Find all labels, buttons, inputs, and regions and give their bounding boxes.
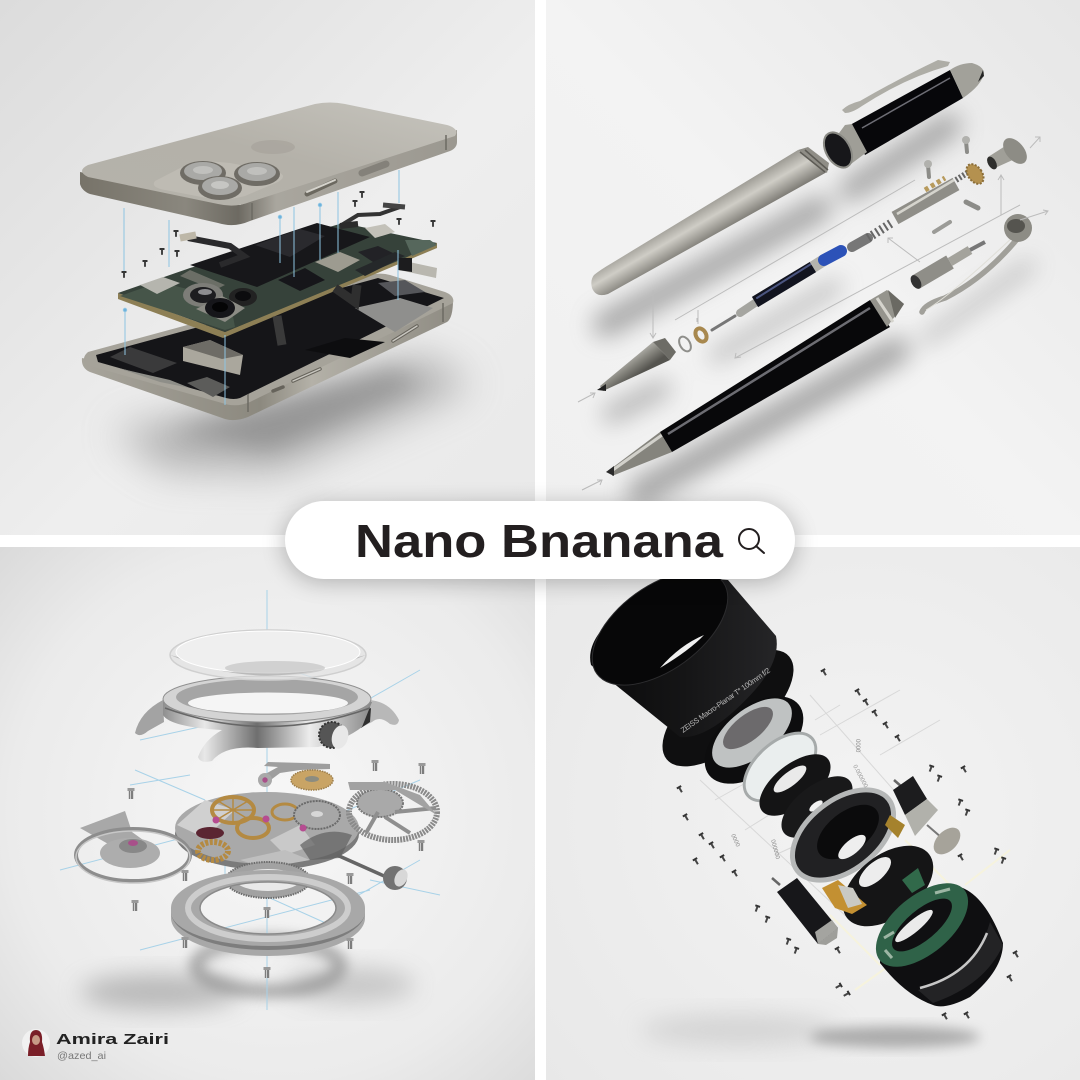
panel: exploded watch [0,547,535,1080]
antenna seams [248,303,443,412]
silver shield pieces [140,277,180,294]
left lug [135,700,164,735]
bezel rim [163,676,371,722]
case body with front lug [163,702,372,762]
front glass ring [689,679,819,801]
lock rings [677,326,709,353]
dark wheel area [196,827,224,839]
cap with clip [818,60,984,172]
ruby jewels [212,816,220,824]
small lens parts labels: 0000 [729,833,741,849]
right motor [893,776,965,859]
watch screws [128,760,426,978]
inner sleeve [908,242,985,291]
small lens parts labels [729,739,869,860]
lower tip [597,338,676,391]
small lens parts labels: 000000 [769,839,780,860]
cap black body [850,70,963,155]
orange flex and silver block [822,880,867,914]
ghost logo [251,140,295,154]
right lug [362,700,399,727]
blue guide lines [123,170,399,405]
mechanism barrel [822,815,948,942]
left motor [772,878,838,945]
avatar [22,1029,50,1057]
pen shadows [605,125,1030,492]
silver focus ring [776,772,910,898]
panel: exploded pen [546,0,1080,535]
phone shadow [112,355,472,472]
rear lens body [880,887,1003,1006]
lens: right [234,162,280,186]
silver upper barrel [591,147,829,295]
crown [319,722,345,748]
camera modules [183,283,223,307]
steel gear [294,801,340,829]
end cap tube [985,134,1032,171]
ink refill [712,251,841,330]
phone bottom tray [82,274,453,420]
small green board [902,868,925,893]
toothed ratchet wheel [348,782,437,840]
watch case [135,676,399,762]
main movement [175,792,359,870]
small lens parts labels: 0.000000 [851,764,869,790]
phone top back shell [80,102,457,225]
side buttons [273,326,417,391]
battery [190,223,370,287]
cap collar and opening [828,124,867,167]
phone screws [122,191,436,278]
aperture disc two [771,765,863,849]
aperture disc one [749,743,841,827]
lower gear [226,862,310,898]
cap dome [950,63,984,98]
search title: Nano Bnanana [355,515,723,567]
main board with components [118,205,437,345]
small lens parts labels: 0000 [854,739,860,753]
gray metal patch [355,298,433,332]
hood lettering: ZEISS Macro-Planar T* 100mm f/2 [679,666,772,735]
black lower barrel [606,290,904,476]
credit: avatar and name [22,1029,169,1062]
dimension lines [700,690,1010,990]
volume and power buttons [307,181,335,194]
bridge and gold wheel [258,762,333,790]
assembly arrows [578,137,1048,490]
lens hood [572,548,777,737]
panel: exploded phone [0,0,535,535]
ribbon flex cables [188,238,244,265]
blue construction lines [60,590,440,1010]
vibration block [399,260,437,278]
base ring [171,870,365,956]
small screws [924,136,978,232]
author name: Amira Zairi [56,1031,169,1048]
watch shadow [80,941,415,1010]
detached clip [922,214,1032,312]
icon: magnifier [739,529,764,553]
black chips [278,268,325,291]
panel: exploded lens [546,547,1080,1080]
glass element [732,720,828,814]
camera plateau [154,162,283,200]
author handle: @azed_ai [57,1050,106,1062]
ring behind hood [644,629,812,787]
search pill [285,501,795,581]
lens floor shadow [640,1014,980,1048]
spring mechanism [852,161,987,247]
cap clip [842,60,950,113]
green pcb ring [861,867,983,983]
sapphire crystal [170,630,366,680]
lens: lower [198,176,242,200]
lens: upper [180,161,226,185]
lens screws [676,668,1020,1021]
balance wheel [76,811,190,883]
tray chips and speaker [110,347,177,373]
winding stem and crown [337,855,410,890]
gold gear train [198,797,298,860]
